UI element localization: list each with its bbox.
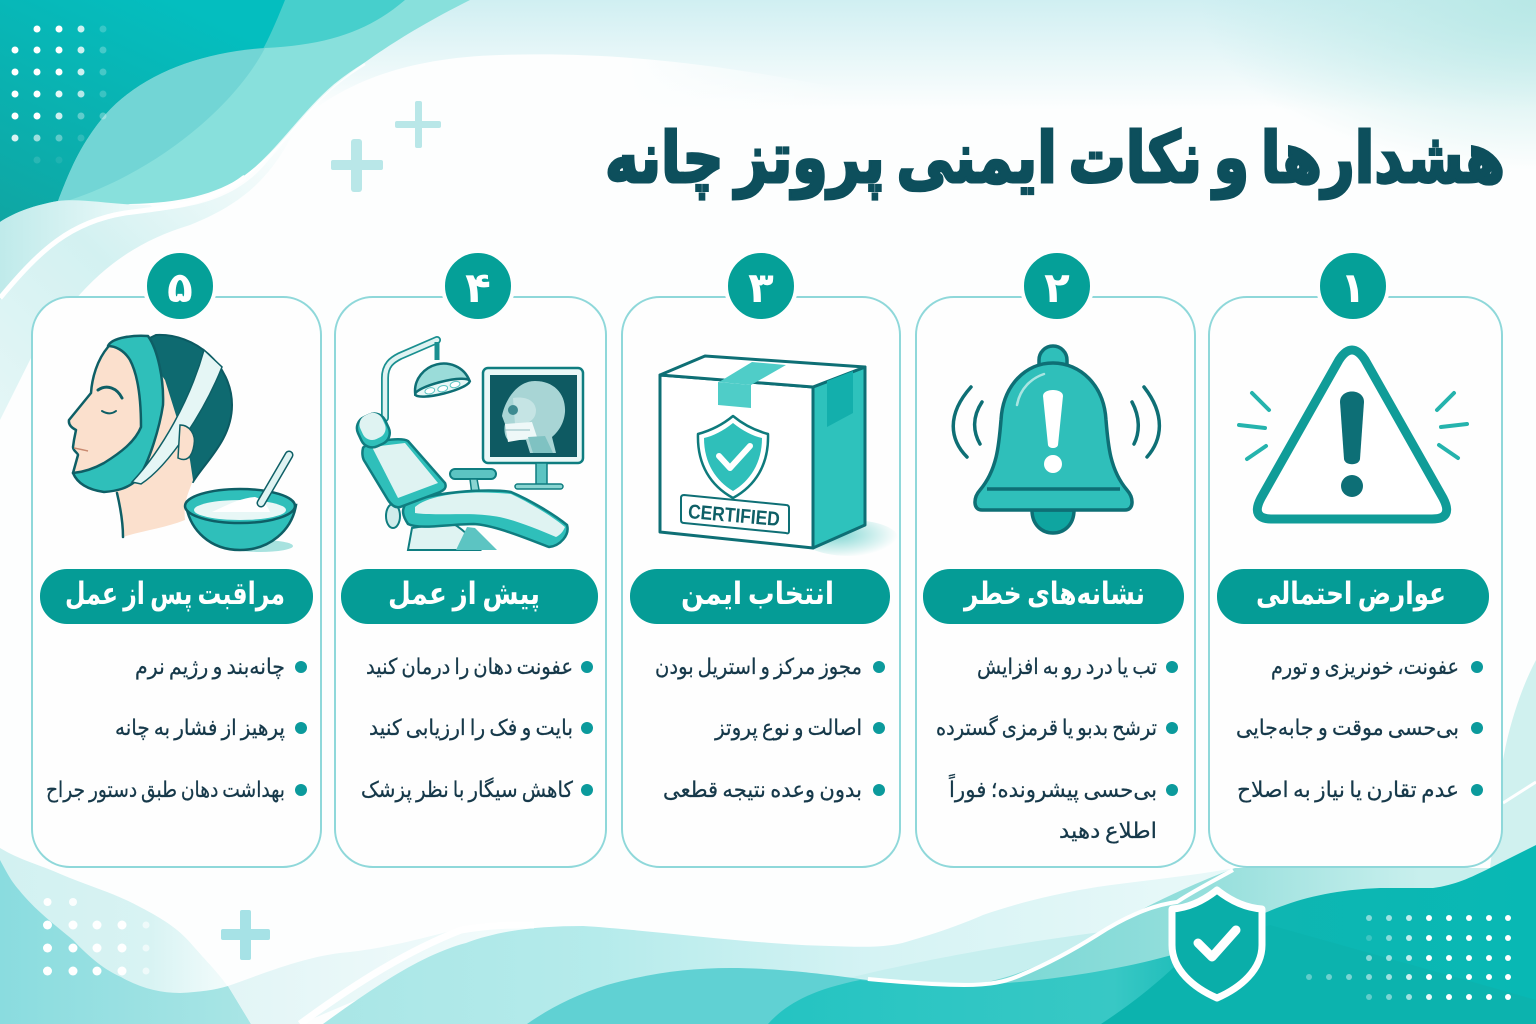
- heading pill: [630, 569, 890, 624]
- bullet list: بی‌حسی پیشرونده؛ فوراً: [949, 773, 1157, 803]
- bullet list: بی‌حسی موقت و جابه‌جایی: [1236, 716, 1459, 741]
- panel: 1 possible complications: [1209, 251, 1502, 867]
- icon: certified box: CERTIFIED: [687, 501, 781, 531]
- bullet list: مجوز مرکز و استریل بودن: [655, 655, 862, 680]
- heading pill: پیش از عمل: [388, 576, 540, 612]
- heading pill: نشانه‌های خطر: [962, 576, 1145, 612]
- panel: 3 safe selection: [622, 251, 900, 867]
- badge 5: ۵: [167, 263, 193, 312]
- plus icon bottom: [221, 910, 270, 960]
- bullet list: [361, 655, 593, 803]
- icon: warning triangle: [1239, 350, 1467, 519]
- bullet list: [1236, 655, 1483, 803]
- bullet list: عفونت، خونریزی و تورم: [1271, 655, 1459, 680]
- heading pill: [40, 569, 313, 624]
- badge 3: [726, 251, 796, 321]
- badge 4: ۴: [465, 263, 491, 312]
- bullet list: بدون وعده نتیجه قطعی: [663, 778, 862, 803]
- bullet list: پرهیز از فشار به چانه: [115, 716, 285, 741]
- bullet list: عدم تقارن یا نیاز به اصلاح: [1237, 778, 1459, 803]
- bullet list: اطلاع دهید: [1059, 819, 1157, 844]
- icon: head with chin strap and bowl: [69, 335, 296, 552]
- plus icons top: [331, 101, 441, 192]
- bullet list: ترشح بدبو یا قرمزی گسترده: [936, 715, 1157, 741]
- bullet list: [936, 655, 1178, 844]
- bullet list: تب یا درد رو به افزایش: [977, 655, 1157, 680]
- decorative dots bottom left: [43, 898, 150, 976]
- heading pill: [341, 569, 598, 624]
- icon: bottom shield: [1172, 890, 1262, 998]
- heading pill: عوارض احتمالی: [1256, 576, 1446, 612]
- decorative dots bottom right: [1306, 915, 1511, 1000]
- badge 4: [443, 251, 513, 321]
- bullet list: بایت و فک را ارزیابی کنید: [369, 716, 573, 741]
- badge 5: [145, 251, 215, 321]
- badge 2: ۲: [1044, 263, 1070, 312]
- heading pill: [923, 569, 1184, 624]
- badge 1: ۱: [1340, 263, 1366, 312]
- bullet list: کاهش سیگار با نظر پزشک: [361, 777, 573, 803]
- bullet list: [46, 655, 307, 803]
- bullet list: چانه‌بند و رژیم نرم: [135, 655, 285, 680]
- panel: 2 danger signs: [916, 251, 1195, 867]
- heading pill: [1217, 569, 1489, 624]
- bullet list: [655, 655, 885, 803]
- panel: 5 post-op care: [32, 251, 321, 867]
- bullet list: بهداشت دهان طبق دستور جراح: [46, 778, 285, 803]
- heading pill: انتخاب ایمن: [681, 576, 834, 612]
- icon: dental chair and x-ray monitor: [353, 340, 583, 550]
- badge 1: [1318, 251, 1388, 321]
- decorative dots top left: [12, 26, 106, 164]
- badge 3: ۳: [748, 263, 774, 312]
- panel: 4 pre-op: [335, 251, 606, 867]
- bullet list: عفونت دهان را درمان کنید: [366, 655, 573, 680]
- heading pill: مراقبت پس از عمل: [65, 576, 285, 612]
- icon: certified box: [660, 356, 898, 556]
- bullet list: اصالت و نوع پروتز: [714, 716, 862, 741]
- badge 2: [1022, 251, 1092, 321]
- icon: bell: [953, 346, 1159, 533]
